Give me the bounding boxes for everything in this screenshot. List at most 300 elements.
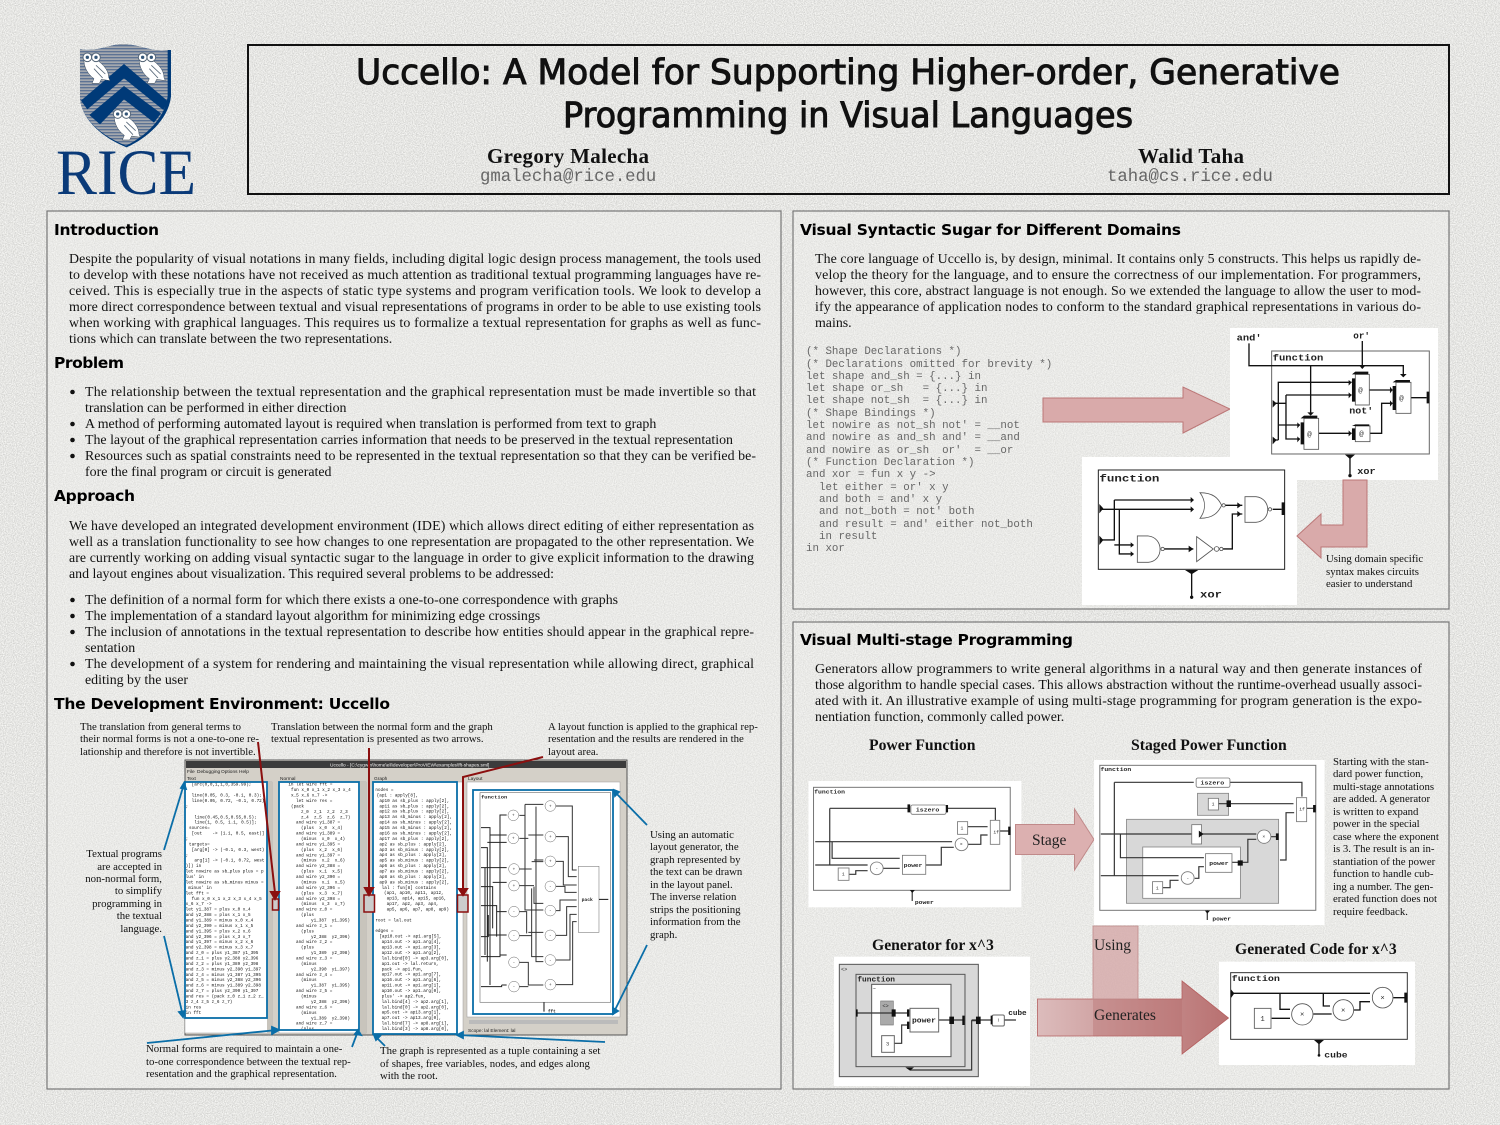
diagram: power function: 1 <box>961 826 964 832</box>
diagram: generator for cube: 3 <box>886 1042 889 1048</box>
normal pane: and wire y2_398 = <box>296 897 341 902</box>
normal pane: (minus <box>301 978 317 983</box>
text pane: and y1_389 = minus x_0 x_4 <box>186 918 254 923</box>
diagram: generated code for cube: 1 <box>1260 1016 1265 1024</box>
text block: introduction: when working with graphical languages. This requires us to formalize a textual representation for graphs as well as func- <box>69 316 761 331</box>
caption: layout generator: strips the positioning <box>650 904 741 916</box>
text block: core language: mains. <box>815 316 852 331</box>
diagram: logic-gate circuit: function <box>1099 474 1160 485</box>
caption: stage explanation: case where the exponent <box>1333 831 1439 843</box>
diagram: logic-gate circuit: xor <box>1200 590 1222 601</box>
normal pane: and wire z_5 = <box>296 989 333 994</box>
code listing: let either = or' x y <box>819 482 949 494</box>
text pane: sources= <box>189 826 210 831</box>
layout pane with FFT circuit: fft <box>548 1010 556 1015</box>
text pane: [arc(0,0,1,1,0,359.99); <box>192 783 251 788</box>
caption: layout function: layout area. <box>548 746 598 758</box>
graph pane: ap15 as sb_minus : apply[2], <box>379 826 452 831</box>
code listing: let shape and_sh = {...} in <box>806 371 981 383</box>
diagram: application-node circuit: function <box>1273 354 1323 364</box>
list: approach steps: sentation <box>85 641 135 656</box>
author: Walid Taha: Walid Taha <box>1138 144 1244 168</box>
screenshot: IDE window: Uccello - [C:\cygwin\home\eli\developer\ProVIEW\examples\fft-shapes.sml] <box>330 762 489 768</box>
caption: translation <box>80 721 259 758</box>
text pane: and z_4 = minus y1_387 y1_395 <box>186 973 261 978</box>
caption: stage explanation: is written to expand <box>1333 806 1419 818</box>
caption: translation: The translation from general terms to <box>80 721 241 733</box>
text block: core language: ify the appearance of application nodes to conform to the standard graphical representations in various do- <box>815 300 1421 315</box>
graph pane: ap4 as sb_plus : apply[2], <box>379 853 447 858</box>
author: Gregory Malecha: gmalecha@rice.edu <box>480 168 656 187</box>
caption: layout generator: graph. <box>650 929 677 941</box>
code listing: in result <box>819 531 877 543</box>
layout pane with FFT circuit: + <box>549 804 552 809</box>
diagram: generator for cube: ~ <box>873 987 876 993</box>
graph pane: ap5 as sb_minus : apply[2], <box>379 859 449 864</box>
graph pane: ap14.out -> ap1.arg[4], <box>382 940 441 945</box>
caption: translation: lationship and therefore is not invertible. <box>80 746 256 758</box>
normal pane: and wire z_4 = <box>296 973 333 978</box>
diagram: generated code for cube: cube <box>1324 1051 1348 1060</box>
caption: arrows: Translation between the normal form and the graph <box>271 721 493 733</box>
caption: stage explanation: multi-stage annotations <box>1333 781 1434 793</box>
caption: translation: their normal forms is not a one-to-one re- <box>80 733 259 745</box>
caption: stage explanation: are added. A generator <box>1333 793 1431 805</box>
graph pane: ap17.out -> ap1.arg[7], <box>382 973 441 978</box>
normal pane: (minus x_2 x_6) <box>301 859 345 864</box>
list: problems: The relationship between the textual representation and the graphical representation must be made invertible so that <box>85 385 756 400</box>
list: problems: Resources such as spatial constraints need to be represented in the textual representation so that they can be verified be- <box>85 449 756 464</box>
diagram: generator for cube: power <box>912 1017 936 1025</box>
diagram: application-node circuit: @ <box>1399 395 1404 403</box>
diagram: staged power function: power <box>1209 861 1229 867</box>
arrow: Using <box>1093 926 1138 999</box>
author: Walid Taha <box>1107 144 1273 187</box>
text block: core language: The core language of Uccello is, by design, minimal. It contains only 5 constructs. This helps us rapidly de- <box>815 252 1421 267</box>
caption: layout generator <box>650 829 743 941</box>
text pane: )]) in <box>186 864 202 869</box>
diagram: generated code for cube: function <box>1232 975 1280 984</box>
text pane: line(1, 0.5, 1.1, 0.5)]; <box>194 821 257 826</box>
screenshot: IDE window: Graph <box>374 776 388 782</box>
graph pane: ap10 as sb_plus : apply[2], <box>379 799 449 804</box>
caption: stage explanation: Starting with the stan- <box>1333 756 1429 768</box>
normal pane: z_0 z_1 z_2 z_3 <box>301 810 348 815</box>
graph pane: lal.bind[3] -> ap8.arg[0], <box>382 1027 449 1032</box>
normal pane: and wire z_6 = <box>296 1005 333 1010</box>
list: approach steps: The inclusion of annotations in the textual representation to describe how entities should appear in the graphical repre- <box>85 625 754 640</box>
graph pane: ap16 as sb_minus : apply[2], <box>379 831 452 836</box>
caption: textual programs: non-normal form, <box>85 873 162 885</box>
screenshot: IDE window: Help <box>239 769 249 775</box>
caption: domain specific syntax: syntax makes circuits <box>1326 566 1419 578</box>
code listing: and xor = fun x y -> <box>806 469 936 481</box>
caption: arrows <box>271 721 493 745</box>
caption: normal forms: Normal forms are required to maintain a one- <box>146 1043 343 1055</box>
caption: layout function <box>548 721 758 758</box>
diagram: power function: × <box>960 842 963 848</box>
graph pane: ap3 as sb_minus : apply[2], <box>379 848 449 853</box>
graph pane: ap13.out -> ap1.arg[3], <box>382 946 441 951</box>
screenshot: IDE window: Text <box>187 776 196 782</box>
layout pane with FFT circuit: - <box>513 910 515 915</box>
layout pane with FFT circuit <box>467 782 620 1034</box>
diagram: application-node circuit: not' <box>1349 407 1373 417</box>
text block: introduction: ceived. This is especially true in the aspects of static type systems and program verification tools. We look to develop a <box>69 284 761 299</box>
caption: tuple graph: of shapes, free variables, nodes, and edges along <box>380 1058 590 1070</box>
code listing: and nowire as or_sh or' = __or <box>806 445 1013 457</box>
normal pane: and wire z_7 = <box>296 1022 333 1027</box>
graph pane: [ap10.out -> ap1.arg[5], <box>379 935 442 940</box>
normal pane: y2_388 y2_396) <box>311 935 350 940</box>
text pane: ; <box>186 853 188 858</box>
text block: approach: well as a translation functionality to see how changes to one representation are propagated to the other representation. We <box>69 535 754 550</box>
graph pane: lal : fun[8] contains <box>382 886 437 891</box>
normal pane: (minus <box>301 962 317 967</box>
graph pane: root = lal.out <box>375 918 412 923</box>
normal pane: y1_389 y2_398) <box>311 1016 350 1021</box>
diagram: application-node circuit: @ <box>1307 431 1312 439</box>
list: problems: A method of performing automated layout is required when translation is performed from text to graph <box>85 417 656 432</box>
text block: introduction <box>69 252 761 347</box>
caption: textual programs: language. <box>120 923 162 935</box>
title <box>356 53 1340 136</box>
graph pane: (ap1, ap10, ap11, ap12, <box>384 891 444 896</box>
text pane: ; <box>186 837 188 842</box>
caption: layout function: resentation and the results are rendered in the <box>548 733 744 745</box>
graph pane: ap11.out -> ap1.arg[1], <box>382 984 441 989</box>
layout pane with FFT circuit: - <box>513 934 515 939</box>
text pane: and z_1 = plus y2_388 y2_396 <box>186 957 259 962</box>
graph pane: ap5.out -> ap13.arg[1], <box>382 1011 441 1016</box>
caption: textual programs: to simplify <box>115 885 163 897</box>
list: problems: fore the final program or circuit is generated <box>85 465 332 480</box>
text pane: and y1_397 = minus x_2 x_6 <box>186 940 254 945</box>
layout pane with FFT circuit: - <box>549 958 552 963</box>
screenshot: IDE window: Debugging <box>197 769 221 775</box>
caption: normal forms <box>146 1043 351 1080</box>
code listing: (* Function Declaration *) <box>806 457 974 469</box>
graph pane: ap7.out -> ap13.arg[0], <box>382 1016 441 1021</box>
text pane: and y2_390 = minus x_1 x_5 <box>186 924 254 929</box>
text pane: lus' in <box>186 875 204 880</box>
text pane: arg[1] -> (-0.1, 0.72, west <box>194 859 265 864</box>
layout pane with FFT circuit: + <box>549 835 552 840</box>
heading: The Development Environment: The Development Environment: Uccello <box>54 695 390 713</box>
caption: stage explanation: function to handle cub- <box>1333 868 1434 880</box>
text block: generators: ated with it. An illustrative example of using multi-stage programming for program generation is the expo- <box>815 694 1422 709</box>
diagram: generated code for cube: × <box>1300 1012 1304 1020</box>
code listing: (* Shape Bindings *) <box>806 408 936 420</box>
layout pane with FFT circuit: - <box>549 909 552 914</box>
text pane: [arg[0] -> (-0.1, 0.3, west) <box>192 848 264 853</box>
text pane: [out -> (1.1, 0.5, east)] <box>192 832 264 837</box>
caption: textual programs: Textual programs <box>86 848 162 860</box>
text pane: let fft = <box>186 891 209 896</box>
caption: textual programs: programming in <box>92 898 163 910</box>
caption: layout generator: the text can be drawn <box>650 866 743 878</box>
diagram: staged power function: iszero <box>1201 780 1224 786</box>
text pane: and y1_395 = plus x_2 x_6 <box>186 929 251 934</box>
text pane: line(0.45,0.5,0.55,0.5); <box>194 815 257 820</box>
arrow: block diagram to gates <box>1297 480 1367 558</box>
graph pane: ap1.out -> lal.return, <box>382 962 439 967</box>
layout pane with FFT circuit: + <box>513 884 516 889</box>
screenshot: IDE window <box>185 760 627 1035</box>
caption: stage explanation: require feedback. <box>1333 906 1408 918</box>
text pane: 3 z_4 z_5 z_6 z_7) <box>186 1000 232 1005</box>
subheading: Power Function: Power Function <box>869 737 976 754</box>
logo: Rice University shield and wordmark: RICE <box>56 137 196 209</box>
text block: approach <box>69 519 754 582</box>
text block: generators: those algorithm to handle special cases. This allows abstraction without the runtime-overhead usually associ- <box>815 678 1422 693</box>
normal pane: y2_390 y1_397) <box>311 967 350 972</box>
normal pane: (minus x_0 x_4) <box>301 837 345 842</box>
graph pane: ap14 as sb_minus : apply[2], <box>379 821 452 826</box>
caption: tuple graph <box>380 1045 600 1082</box>
layout pane with FFT circuit: - <box>549 934 552 939</box>
graph pane: lal.bind[4] -> ap2.arg[1], <box>382 1000 449 1005</box>
layout pane with FFT circuit: + <box>512 837 515 842</box>
text block: generators: Generators allow programmers to write general algorithms in a natural way and then generate instances of <box>815 662 1422 677</box>
text block: introduction: tions which can translate between the two representations. <box>69 332 392 347</box>
diagram: generator for cube: <> <box>882 1003 889 1009</box>
diagram: generator for cube <box>834 957 1030 1086</box>
graph pane: ap8 as sb_plus : apply[2], <box>379 875 447 880</box>
panel: visual syntactic sugar <box>793 211 1449 609</box>
code listing: and not_both = not' both <box>819 506 975 518</box>
text pane <box>185 782 272 1033</box>
normal pane: z_4 z_5 z_6 z_7) <box>301 815 350 820</box>
diagram: generated code for cube: × <box>1380 995 1385 1003</box>
title: Uccello: A Model for Supporting Higher-order, Generative <box>356 53 1340 93</box>
logo: Rice University shield and wordmark <box>56 44 196 209</box>
normal pane: (plus x_3 x_7) <box>301 891 343 896</box>
graph pane: ap7 as sb_minus : apply[2], <box>379 869 449 874</box>
normal pane: y1_387 y1_395) <box>311 918 350 923</box>
panel: left column <box>47 211 781 1089</box>
author: Gregory Malecha: Gregory Malecha <box>487 144 650 168</box>
text pane: in fft <box>186 1011 202 1016</box>
diagram: power function: if <box>993 829 999 835</box>
normal pane: (plus <box>301 1027 314 1032</box>
text block: core language: however, this core, abstract language is not enough. So we extended the language to allow the user to mod- <box>815 284 1421 299</box>
normal pane: and wire y2_390 = <box>296 875 341 880</box>
author: Walid Taha: taha@cs.rice.edu <box>1107 168 1273 187</box>
author: Gregory Malecha <box>480 144 656 187</box>
code listing: let shape not_sh = {...} in <box>806 395 987 407</box>
graph pane: pack -> ap1.fun, <box>382 967 423 972</box>
graph pane: ap13, ap14, ap15, ap16, <box>387 897 446 902</box>
text pane: in res <box>186 1005 202 1010</box>
text block: generators <box>815 662 1422 725</box>
text pane: and z_2 = plus y1_389 y2_398 <box>186 962 259 967</box>
text pane: and z_0 = plus y1_387 y1_395 <box>186 951 259 956</box>
screenshot: IDE window: Normal <box>280 776 295 782</box>
caption: layout generator: The inverse relation <box>650 891 737 903</box>
code listing: and both = and' x y <box>819 494 943 506</box>
normal pane: (plus <box>301 913 314 918</box>
graph pane: {ap1 : apply[8], <box>377 793 418 798</box>
heading: Visual Syntactic Sugar: Visual Syntactic Sugar for Different Domains <box>800 221 1181 239</box>
graph pane: nodes = <box>375 788 394 793</box>
list: problems: The layout of the graphical representation carries information that needs to be preserved in the textual representation <box>85 433 733 448</box>
normal pane: (minus x_1 x_5) <box>301 880 345 885</box>
caption: tuple graph: with the root. <box>380 1070 438 1082</box>
heading: Introduction: Introduction <box>54 221 159 239</box>
graph pane: ap12.out -> ap1.arg[2], <box>382 951 441 956</box>
graph pane: lal.bind[7] -> ap8.arg[1], <box>382 1022 449 1027</box>
caption: textual programs: the textual <box>117 910 162 922</box>
normal pane: y1_387 y1_395) <box>311 984 350 989</box>
graph pane <box>373 782 463 1034</box>
heading: Visual Multi-stage Programming: Visual Multi-stage Programming <box>800 631 1073 649</box>
arrow: Stage: Stage <box>1032 832 1067 849</box>
text pane: minus' in <box>188 886 212 891</box>
normal pane: and wire y2_396 = <box>296 886 341 891</box>
diagram: application-node circuit <box>1230 328 1438 480</box>
diagram: generator for cube: <> <box>841 967 847 973</box>
caption: domain specific syntax <box>1326 553 1423 590</box>
subheading: Generated Code for x^3: Generated Code for x^3 <box>1235 941 1397 958</box>
normal pane: and wire y1_387 = <box>296 821 341 826</box>
text pane: let nowire as sb_plus plus = p <box>186 870 264 875</box>
caption: normal forms: to-one correspondence between the textual rep- <box>146 1056 351 1068</box>
caption: layout generator: Using an automatic <box>650 829 734 841</box>
text pane: let y1_387 = plus x_0 x_4 <box>186 908 251 913</box>
screenshot: IDE window: Options <box>221 769 238 775</box>
diagram: staged power function: 1 <box>1156 885 1159 891</box>
diagram: staged power function: × <box>1262 834 1265 840</box>
diagram: power function: power <box>904 863 922 869</box>
layout pane with FFT circuit: + <box>513 867 516 872</box>
subheading: Generator for x^3: Generator for x^3 <box>872 937 994 954</box>
normal pane <box>279 782 366 1033</box>
diagram: generator for cube: cube <box>1008 1010 1027 1018</box>
text block: introduction: more direct correspondence between textual and visual representations of programs in order to be able to use existing tools <box>69 300 761 315</box>
layout pane with FFT circuit: + <box>549 860 552 865</box>
text block: approach: and layout engines about visualization. This required several problems to be addressed: <box>69 567 554 582</box>
text block: approach: We have developed an integrated development environment (IDE) which allows direct editing of either representation as <box>69 519 754 534</box>
text pane: and y2_396 = plus x_3 x_7 <box>186 935 251 940</box>
code listing: let shape or_sh = {...} in <box>806 383 987 395</box>
text pane: ; <box>186 804 188 809</box>
graph pane: ap9 as sb_minus : apply[2], <box>379 880 449 885</box>
graph pane: ap13 as sb_minus : apply[2], <box>379 815 452 820</box>
caption: domain specific syntax: Using domain specific <box>1326 553 1423 565</box>
diagram: application-node circuit: @ <box>1358 387 1363 395</box>
caption: layout generator: information from the <box>650 916 741 928</box>
graph pane: lal.bind[0] -> ap2.arg[0], <box>382 1005 449 1010</box>
normal pane: y1_389 y2_398) <box>311 951 350 956</box>
graph pane: ap5, ap6, ap7, ap8, ap9) <box>387 908 449 913</box>
title: Programming in Visual Languages <box>563 96 1133 136</box>
text block: introduction: Despite the popularity of visual notations in many fields, including digital logic design process management, the tools used <box>69 252 761 267</box>
callout arrows: blue <box>147 783 647 1047</box>
caption: layout generator: layout generator, the <box>650 841 739 853</box>
text block: core language: velop the theory for the language, and to ensure the correctness of our implementation. For programmers, <box>815 268 1421 283</box>
normal pane: let wire res = <box>296 799 333 804</box>
normal pane: (plus x_1 x_5) <box>301 870 343 875</box>
arrow: code to block diagram <box>1043 387 1230 433</box>
normal pane: (minus <box>301 1011 317 1016</box>
text pane: and z_7 = plus y2_390 y1_397 <box>186 989 259 994</box>
diagram: application-node circuit: @ <box>1359 431 1364 439</box>
normal pane: fun x_0 x_1 x_2 x_3 x_4 <box>291 788 351 793</box>
diagram: power function: iszero <box>916 807 939 813</box>
caption: layout function: A layout function is applied to the graphical rep- <box>548 721 758 733</box>
normal pane: and wire z_1 = <box>296 924 333 929</box>
heading: Problem: Problem <box>54 354 124 372</box>
diagram: application-node circuit: xor <box>1357 467 1376 477</box>
diagram: staged power function: if <box>1299 807 1305 813</box>
diagram: application-node circuit: and' <box>1237 334 1262 344</box>
normal pane: and wire y1_389 = <box>296 832 341 837</box>
caption: arrows: textual representation is presented as two arrows. <box>271 733 484 745</box>
subheading: Staged Power Function: Staged Power Function <box>1131 737 1287 754</box>
code listing: in xor <box>806 543 845 555</box>
graph pane: ap12 as sb_plus : apply[2], <box>379 810 449 815</box>
screenshot: IDE window: Layout <box>468 776 483 782</box>
caption: textual programs: are accepted in <box>97 861 163 873</box>
list: approach steps: The development of a system for rendering and maintaining the visual representation while allowing direct, graphical <box>85 657 754 672</box>
graph pane: plus' -> ap2.fun, <box>382 994 426 999</box>
caption: stage explanation: erated function does not <box>1333 893 1437 905</box>
normal pane: y2_388 y2_396) <box>311 1000 350 1005</box>
diagram: power function: function <box>814 789 845 795</box>
caption: domain specific syntax: easier to understand <box>1326 578 1413 590</box>
screenshot: IDE window: File <box>187 769 195 775</box>
text pane: fun x_0 x_1 x_2 x_3 x_4 x_5 <box>192 897 262 902</box>
arrow: Generates <box>1038 981 1228 1054</box>
text block: generators: nentiation function, commonly called power. <box>815 710 1064 725</box>
graph pane: ap17, ap2, ap3, ap4, <box>387 902 439 907</box>
text pane: and z_5 = minus y2_388 y2_396 <box>186 978 261 983</box>
graph pane: ap6 as sb_plus : apply[2], <box>379 864 447 869</box>
diagram: generated code for cube: × <box>1341 1007 1345 1015</box>
graph pane: lal.bind[0] -> ap3.arg[0], <box>382 956 449 961</box>
text pane: let nowire as sb_minus minus = <box>186 880 264 885</box>
caption: stage explanation: dard power function, <box>1333 768 1424 780</box>
normal pane: and wire y1_395 = <box>296 842 341 847</box>
layout pane with FFT circuit: Scope: lal Element: lal <box>468 1028 515 1034</box>
list: approach steps: The implementation of a standard layout algorithm for minimizing edge crossings <box>85 609 540 624</box>
code listing <box>806 346 1052 555</box>
normal pane: (plus <box>301 929 314 934</box>
diagram: generated code for cube <box>1219 962 1415 1065</box>
diagram: staged power function: - <box>1186 876 1189 881</box>
red highlight boxes <box>272 895 468 912</box>
normal pane: (plus x_0 x_4) <box>301 826 343 831</box>
list: approach steps: The definition of a normal form for which there exists a one-to-one correspondence with graphs <box>85 593 618 608</box>
text pane: line(0.05, 0.72, -0.1, 0.72) <box>192 799 264 804</box>
normal pane: (plus <box>301 946 314 951</box>
text pane: and y2_398 = minus x_3 x_7 <box>186 946 254 951</box>
layout pane with FFT circuit: function <box>481 794 508 800</box>
caption: tuple graph: The graph is represented as a tuple containing a set <box>380 1045 600 1057</box>
list: approach steps <box>70 593 754 688</box>
caption: stage explanation: power in the special <box>1333 818 1420 830</box>
normal pane: x_5 x_6 x_7 -> <box>291 794 328 799</box>
code listing: and result = and' either not_both <box>819 519 1033 531</box>
graph pane: ap17 as sb_plus : apply[2], <box>379 837 449 842</box>
diagram: power function: - <box>875 867 878 872</box>
title block <box>248 45 1449 194</box>
code listing: (* Shape Declarations *) <box>806 346 962 358</box>
graph pane: ap2 as sb_plus : apply[2], <box>379 842 447 847</box>
graph pane: ap11 as sb_plus : apply[2], <box>379 804 449 809</box>
arrow: Using: Using <box>1094 937 1131 954</box>
